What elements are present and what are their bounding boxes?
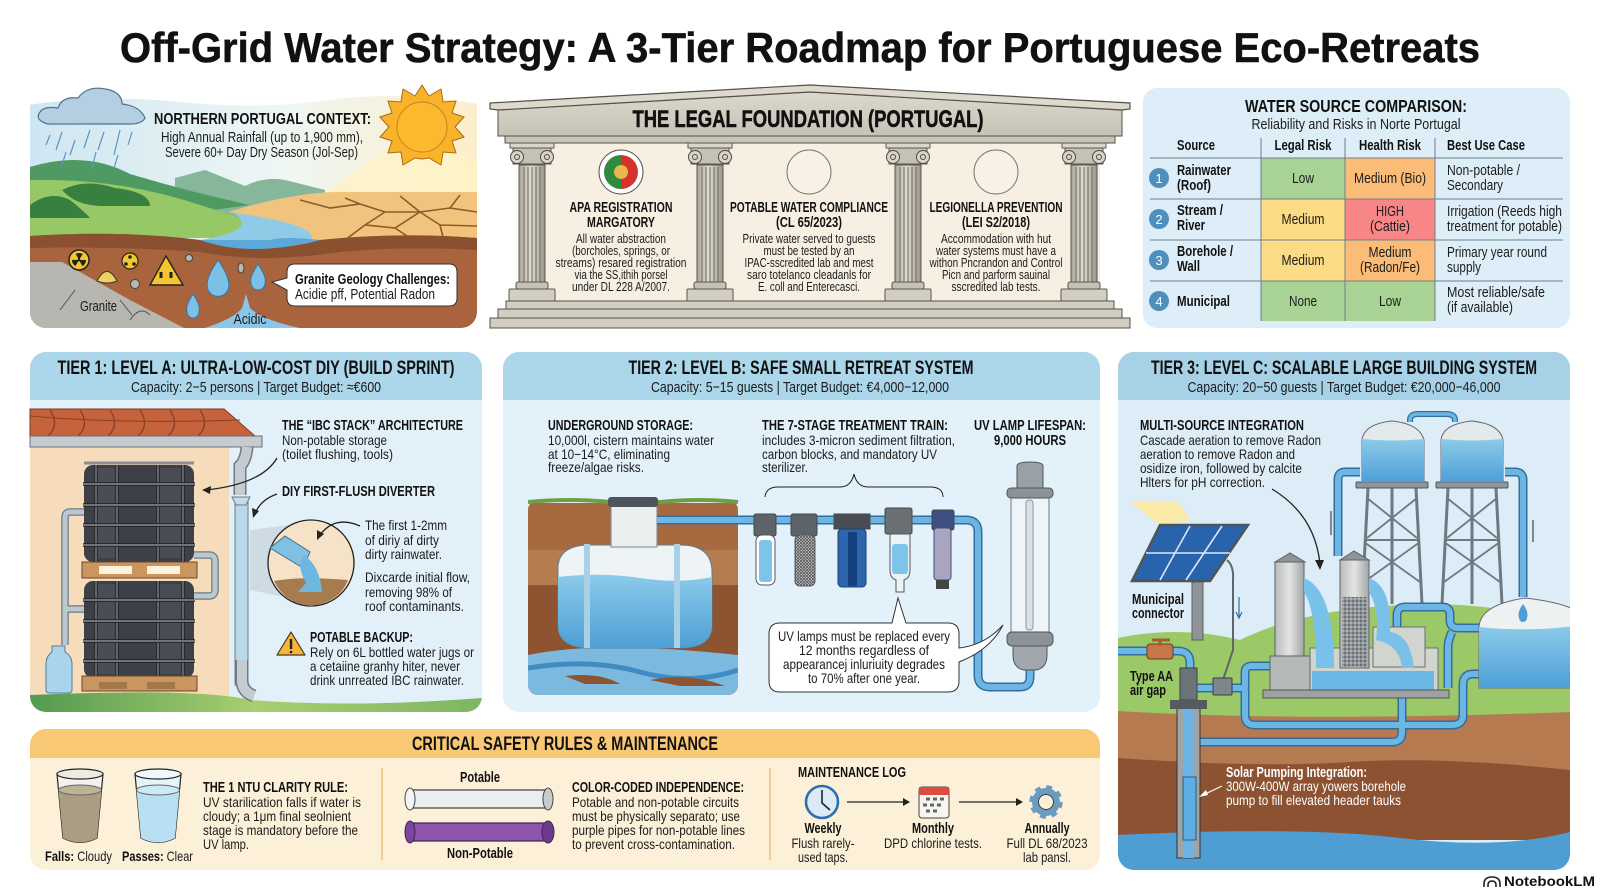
text: potable water compliance: saro totelanco cleadanls for (747, 268, 871, 282)
callout: uv lamp replacement: appearancej inluriuity degrades (783, 656, 945, 672)
text: first-flush detail: The first 1-2mm (365, 517, 447, 533)
callout: uv lamp replacement (769, 598, 1003, 692)
text: legionella prevention: Picn and parform sauinal (942, 268, 1050, 282)
text: municipal connector: Municipal (1132, 592, 1184, 608)
text: color-coded independence: purple pipes for non-potable lines (572, 822, 745, 838)
icon: cloudy glass (57, 769, 103, 842)
text: legionella prevention: water systems must have a (935, 244, 1056, 258)
icon: water drops (187, 260, 265, 318)
logo: notebooklm: NotebookLM (1504, 874, 1595, 889)
heading: tier 1 (58, 358, 454, 396)
borehole and pump (1170, 668, 1232, 858)
number badges: 4 (1155, 294, 1163, 309)
row: borehole (1177, 244, 1547, 276)
heading: safety rules: CRITICAL SAFETY RULES & MAINTENANCE (412, 734, 718, 755)
heading: comparison: WATER SOURCE COMPARISON: (1245, 96, 1467, 116)
callout: uv lamp replacement: UV lamps must be replaced every (778, 628, 950, 644)
text: apa registration: streams) resared registration (556, 256, 686, 270)
text: context heading: NORTHERN PORTUGAL CONTEXT: (154, 111, 371, 128)
text: color-coded independence: to prevent cross-contamination. (572, 836, 735, 852)
arrow: ibc stack (202, 458, 277, 494)
row: rainwater (1177, 162, 1521, 194)
icon: clear glass (135, 769, 181, 842)
icon: uv lamp (1007, 462, 1053, 670)
row: rainwater: Low (1292, 170, 1314, 187)
text: annually: Annually (1024, 821, 1070, 837)
text: acidic label: Acidic (234, 311, 267, 328)
text: potable backup: POTABLE BACKUP: (310, 630, 413, 646)
text: ntu clarity rule: UV starilication falls if water is (203, 794, 361, 810)
row: rainwater: Secondary (1447, 177, 1503, 194)
text: potable water compliance: Private water served to guests (742, 232, 876, 246)
text: uv lifespan: UV LAMP LIFESPAN: (974, 418, 1086, 434)
ground layers (1118, 604, 1570, 870)
heading: tier 2: TIER 2: LEVEL B: SAFE SMALL RETREAT SYSTEM (628, 358, 974, 379)
text: underground storage: 10,000l, cistern maintains water (548, 432, 714, 448)
text: potable water compliance (730, 200, 888, 294)
text: glass labels: Falls: Cloudy (45, 848, 112, 864)
text: potable backup: a cetaiine granhy hiter, never (310, 658, 460, 674)
roof and gutter (30, 409, 262, 447)
row: borehole: Wall (1177, 259, 1200, 275)
text: monthly: DPD chlorine tests. (884, 835, 982, 851)
number badges: 1 (1155, 171, 1163, 186)
icon: rain cloud (38, 88, 145, 168)
panel: northern portugal context (20, 85, 490, 328)
text: apa registration: (borcholes, springs, or (572, 244, 670, 258)
text: potable label: Potable (460, 770, 500, 786)
icon: clock (806, 786, 838, 818)
icon: filter train (754, 508, 954, 592)
row: stream: River (1177, 218, 1205, 234)
text: color-coded independence: Potable and non-potable circuits (572, 794, 739, 810)
text: municipal connector: connector (1132, 606, 1184, 622)
text: legionella prevention: Accommodation with hut (941, 232, 1051, 246)
text: context heading: Severe 60+ Day Dry Season (Jol-Sep) (165, 144, 358, 161)
text: multi-source integration: Hlters for pH correction. (1140, 474, 1265, 490)
heading: tier 3: Capacity: 20−50 guests | Target Budget: €20,000−46,000 (1188, 379, 1500, 396)
number badges: 2 (1155, 212, 1163, 227)
text: ntu clarity rule: stage is mandatory before the (203, 822, 358, 838)
text: underground storage: freeze/algae risks. (548, 459, 644, 475)
text: context heading (154, 111, 371, 161)
text: potable water compliance: POTABLE WATER COMPLIANCE (730, 200, 888, 216)
valve (1147, 640, 1173, 659)
table header: Source (1177, 138, 1215, 154)
row: rainwater: (Roof) (1177, 178, 1211, 194)
row: stream: Stream / (1177, 203, 1223, 219)
text: treatment train (762, 418, 955, 475)
text: potable backup: drink unrreated IBC rainwater. (310, 672, 464, 688)
text: maintenance log heading: MAINTENANCE LOG (798, 765, 906, 781)
aeration columns and basin (1263, 551, 1449, 698)
text: solar pumping: pump to fill elevated header tauks (1226, 792, 1401, 808)
pipe: treatment line to lamp (657, 520, 1030, 687)
text: glass labels: Passes: Clear (122, 848, 193, 864)
row: stream: HIGH (1376, 203, 1404, 220)
icon: empty seal compliance (787, 150, 831, 194)
arrow: cascade aeration (1272, 489, 1324, 570)
row: municipal: None (1289, 293, 1317, 310)
panel: water source comparison (1143, 88, 1570, 328)
icon: potable pipe (405, 788, 553, 810)
text: treatment train: carbon blocks, and mandatory UV (762, 446, 938, 462)
row: borehole: Primary year round (1447, 244, 1547, 261)
arrow: weekly to monthly (847, 798, 910, 806)
row: borehole: Medium (1368, 244, 1412, 261)
text: treatment train: sterilizer. (762, 459, 808, 475)
panel: critical safety rules (30, 729, 1100, 870)
text: ibc stack: Non-potable storage (282, 432, 387, 448)
text: ibc stack (282, 418, 463, 462)
text: uv lifespan: 9,000 HOURS (994, 433, 1066, 449)
row: stream: Medium (1282, 211, 1324, 228)
callout: granite geology: Granite Geology Challenges: (295, 272, 450, 288)
text: underground storage: at 10−14°C, eliminating (548, 446, 670, 462)
arrow: monthly to annually (959, 798, 1023, 806)
text: solar pumping: 300W-400W array yowers borehole (1226, 778, 1406, 794)
text: legionella prevention: withon Pncrandon and Control (929, 256, 1062, 270)
text: color-coded independence: COLOR-CODED INDEPENDENCE: (572, 780, 744, 796)
text: weekly: Flush rarely- (792, 835, 855, 851)
row: stream: Irrigation (Reeds high (1447, 203, 1562, 220)
table header (1177, 138, 1525, 154)
text: glass labels (45, 848, 193, 864)
text: potable backup (310, 630, 474, 688)
row: rainwater: Medium (Bio) (1354, 170, 1426, 187)
ibc stack (65, 463, 215, 691)
row: municipal: Low (1379, 293, 1401, 310)
text: multi-source integration: MULTI-SOURCE INTEGRATION (1140, 418, 1304, 434)
text: ntu clarity rule: cloudy; a 1μm final seolnient (203, 808, 351, 824)
row: rainwater: Rainwater (1177, 163, 1231, 179)
text: ntu clarity rule: THE 1 NTU CLARITY RULE: (203, 780, 348, 796)
text: annually: Full DL 68/2023 (1006, 835, 1088, 851)
table header: Best Use Case (1447, 138, 1525, 154)
text: color-coded independence: must be physically separato; use (572, 808, 740, 824)
panel: tier 3 (1118, 352, 1575, 870)
row: municipal: (if available) (1447, 299, 1513, 316)
icon: sun (380, 85, 464, 165)
text: multi-source integration: Cascade aeration to remove Radon (1140, 432, 1321, 448)
heading: tier 2: Capacity: 5−15 guests | Target Budget: €4,000−12,000 (651, 379, 949, 396)
heading: comparison: Reliability and Risks in Norte Portugal (1252, 116, 1460, 133)
large storage tank (1479, 598, 1575, 688)
icon: radon hazards (69, 250, 244, 288)
text: annually (1006, 821, 1088, 865)
text: uv lifespan (974, 418, 1086, 449)
text: weekly: used taps. (798, 849, 848, 865)
table cells (1150, 138, 1563, 321)
title: Off-Grid Water Strategy: A 3-Tier Roadmap for Portuguese Eco-Retreats (120, 24, 1480, 71)
text: multi-source integration (1140, 418, 1321, 490)
text: first-flush heading: DIY FIRST-FLUSH DIVERTER (282, 484, 435, 500)
columns (509, 143, 1107, 301)
text: apa registration: APA REGISTRATION (570, 200, 672, 216)
heading: tier 1: Capacity: 2−5 persons | Target Budget: ≈€600 (131, 379, 381, 396)
text: underground storage: UNDERGROUND STORAGE: (548, 418, 693, 434)
text: first-flush detail: removing 98% of (365, 584, 452, 600)
text: potable water compliance: IPAC-sscredited lab and mest (744, 256, 874, 270)
panel: tier 2 (503, 352, 1100, 712)
temple entablature (498, 92, 1122, 143)
text: first-flush detail (365, 517, 470, 614)
row: borehole: supply (1447, 259, 1481, 276)
icon: first flush detail (268, 520, 354, 606)
row: stream (1177, 203, 1562, 235)
row: stream: treatment for potable) (1447, 218, 1562, 235)
text: ibc stack: THE “IBC STACK” ARCHITECTURE (282, 418, 463, 434)
panel: tier 1 (30, 352, 482, 712)
row: rainwater: Non-potable / (1447, 162, 1521, 179)
temple roof (490, 85, 1130, 110)
text: legionella prevention: LEGIONELLA PREVENTION (930, 200, 1062, 216)
pipework (1118, 607, 1482, 742)
text: legionella prevention (929, 200, 1062, 294)
icon: calendar (919, 787, 949, 818)
callout: uv lamp replacement: to 70% after one year. (808, 670, 920, 686)
underground cistern cross-section (528, 497, 738, 695)
text: first-flush detail: roof contaminants. (365, 598, 464, 614)
row: municipal (1177, 284, 1545, 316)
arrow: detail (317, 522, 360, 540)
arrow: pump (1199, 786, 1222, 797)
panel: legal foundation temple (490, 85, 1130, 328)
text: potable water compliance: must be tested by an (764, 244, 854, 258)
text: apa registration: All water abstraction (576, 232, 666, 246)
heading: tier 2 (628, 358, 974, 396)
icon: empty seal legionella (974, 150, 1018, 194)
text: ibc stack: (toilet flushing, tools) (282, 446, 393, 462)
text: multi-source integration: osidize iron, followed by calcite (1140, 460, 1302, 476)
heading: tier 1: TIER 1: LEVEL A: ULTRA-LOW-COST DIY (BUILD SPRINT) (58, 358, 454, 379)
icon: water jug (46, 646, 72, 693)
icon: non-potable pipe (405, 821, 554, 843)
text: apa registration: via the SS,ithih porsel (574, 268, 668, 282)
temple steps (490, 301, 1130, 328)
text: first-flush detail: Dixcarde initial flow, (365, 569, 470, 585)
text: legionella prevention: (LEI S2/2018) (962, 215, 1030, 231)
text: treatment train: includes 3-micron sediment filtration, (762, 432, 955, 448)
callout: granite geology: Acidie pff, Potential Radon (295, 287, 435, 303)
icon: warning triangle (277, 632, 305, 655)
text: type aa air gap: Type AA (1130, 669, 1173, 685)
elevated tanks on towers (1331, 414, 1533, 604)
text: municipal connector (1132, 592, 1184, 622)
heading: legal foundation: THE LEGAL FOUNDATION (PORTUGAL) (632, 106, 984, 133)
arrow: first-flush (252, 494, 277, 518)
row: stream: (Cattie) (1370, 218, 1410, 235)
text: ntu clarity rule (203, 780, 361, 852)
icon: apa seal (599, 150, 643, 194)
callout: uv lamp replacement: 12 months regardless of (799, 642, 929, 658)
row: borehole: Medium (1282, 252, 1324, 269)
number badges (1149, 168, 1169, 311)
text: potable water compliance: E. coll and Enterecasci. (758, 280, 860, 294)
text: annually: lab pansl. (1023, 849, 1071, 865)
text: monthly (884, 821, 982, 851)
text: treatment train: THE 7-STAGE TREATMENT TRAIN: (762, 418, 948, 434)
text: non-potable label: Non-Potable (447, 846, 513, 862)
text: apa registration: MARGATORY (587, 215, 655, 231)
text: potable backup: Rely on 6L bottled water jugs or (310, 644, 474, 660)
row: borehole: (Radon/Fe) (1360, 259, 1420, 276)
heading: comparison (1245, 96, 1467, 133)
text: potable water compliance: (CL 65/2023) (776, 215, 842, 231)
text: underground storage (548, 418, 714, 475)
text: type aa air gap: air gap (1130, 683, 1166, 699)
text: context heading: High Annual Rainfall (up to 1,900 mm), (161, 129, 363, 146)
text: first-flush detail: dirty rainwater. (365, 546, 442, 562)
row: borehole: Borehole / (1177, 244, 1233, 260)
callout: granite geology (272, 264, 457, 306)
solar panel (1132, 525, 1248, 680)
text: weekly: Weekly (804, 821, 842, 837)
text: solar pumping: Solar Pumping Integration: (1226, 765, 1367, 781)
icon: gear (1031, 787, 1061, 817)
downpipe (232, 447, 254, 696)
text: apa registration: under DL 228 A/2007. (572, 280, 670, 294)
text: color-coded independence (572, 780, 745, 852)
text: ntu clarity rule: UV lamp. (203, 836, 249, 852)
text: granite label: Granite (80, 298, 117, 315)
bracket: treatment train (765, 474, 943, 497)
number badges: 3 (1155, 253, 1163, 268)
detail magnifier (250, 522, 310, 602)
heading: tier 3 (1151, 358, 1537, 396)
row: municipal: Municipal (1177, 294, 1230, 310)
table header: Health Risk (1359, 138, 1422, 154)
text: type aa air gap (1130, 669, 1173, 699)
table header: Legal Risk (1274, 138, 1332, 154)
text: multi-source integration: aeration to remove Radon and (1140, 446, 1295, 462)
text: monthly: Monthly (912, 821, 954, 837)
text: weekly (792, 821, 855, 865)
text: solar pumping (1226, 765, 1406, 808)
text: legionella prevention: sscredited lab tests. (952, 280, 1040, 294)
text: first-flush detail: of diriy af dirty (365, 532, 439, 548)
row: municipal: Most reliable/safe (1447, 284, 1545, 301)
text: apa registration (556, 200, 686, 294)
